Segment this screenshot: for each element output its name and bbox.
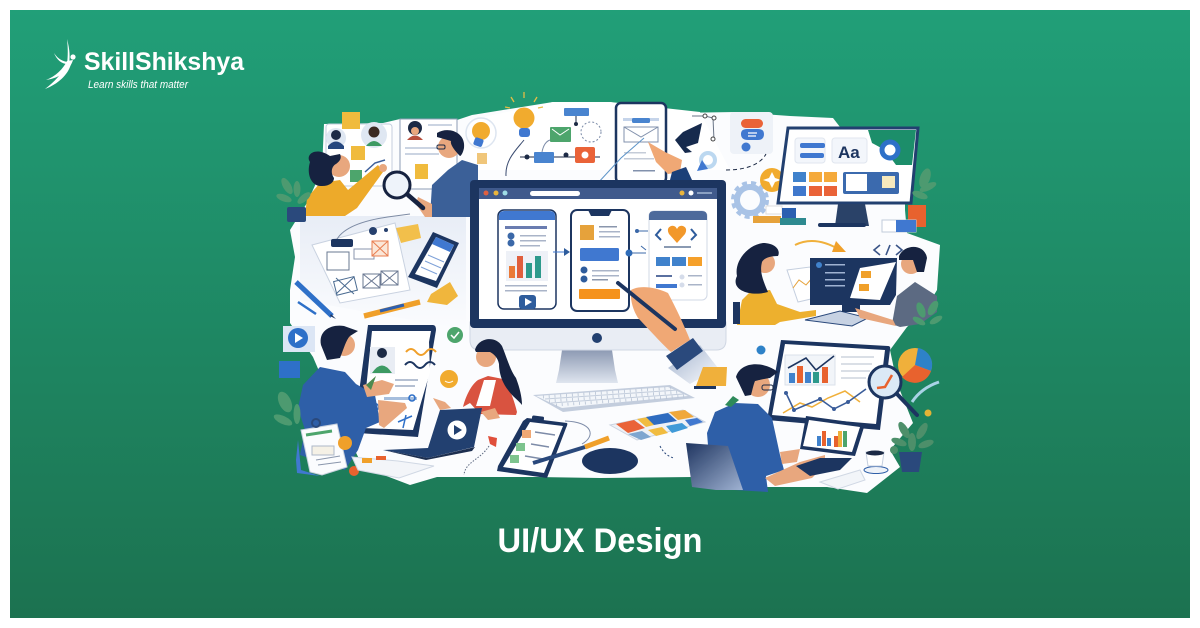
speech badges (440, 327, 463, 388)
magnifier (384, 172, 423, 208)
office chair (686, 443, 743, 490)
profile card: left (326, 112, 392, 186)
person: man with glasses (416, 130, 478, 217)
monitor stand (556, 350, 618, 383)
clip and wire (464, 436, 497, 475)
paper on desk (352, 456, 434, 478)
logo wordmark: SkillShikshya (84, 48, 245, 76)
plant at left (272, 389, 300, 428)
wireframe desk scene (296, 214, 459, 319)
laptop with charts (796, 416, 865, 489)
phone with hand pointing (597, 103, 692, 184)
main monitor (470, 180, 726, 384)
stylus pen (533, 438, 609, 463)
design system monitor (778, 128, 918, 227)
wireframe notebook (312, 214, 410, 303)
gears and star badge (726, 154, 806, 225)
logo icon: leaping figure (45, 39, 76, 89)
potted plant (890, 420, 935, 472)
logo tagline: Learn skills that matter (88, 79, 189, 91)
phone screen: analytics (498, 210, 556, 309)
central illustration (272, 92, 944, 493)
analytics monitor (767, 340, 890, 430)
monitor chin (470, 322, 726, 350)
window controls (484, 190, 712, 196)
person: woman with tablet (733, 243, 824, 325)
arrow and code symbols (795, 241, 902, 255)
magnifier with trend (869, 366, 917, 415)
large light bulb (505, 92, 543, 176)
coffee cup (864, 450, 888, 474)
top-left scene: people reviewing profile cards (275, 112, 496, 222)
card screen: favourite (649, 211, 707, 300)
pencils (296, 282, 420, 319)
phone screen: list (571, 210, 629, 311)
design tool tile (730, 112, 773, 154)
person: man at laptop (707, 364, 825, 492)
keyboard (533, 385, 695, 412)
connector arrow (553, 248, 570, 256)
person: woman in red jacket (433, 339, 522, 420)
small note and droplet (660, 346, 766, 458)
monitor frame (470, 180, 726, 328)
hand with stylus (618, 283, 718, 384)
clipboard note (296, 419, 359, 476)
type specimen: Aa (838, 143, 860, 162)
white torn-paper backdrop (290, 102, 940, 493)
pen tool icon (675, 114, 717, 171)
laptop with play button (383, 408, 482, 460)
computer mouse (582, 448, 638, 474)
connector node (626, 229, 648, 256)
trend swoosh (912, 382, 939, 416)
profile card: right (400, 119, 457, 189)
person: man in blue shirt (298, 326, 407, 470)
plant sprig (911, 299, 944, 327)
logo: SkillShikshya (45, 39, 245, 91)
dark monitor (805, 258, 897, 326)
pie chart (898, 348, 932, 383)
flow diagram nodes (520, 108, 601, 163)
clipboard checklist (497, 415, 590, 478)
sticky note and symbols (369, 224, 421, 243)
bottom-left scene: reviewing a tablet (272, 325, 522, 478)
handheld phone (408, 232, 459, 288)
bottom-right scene: analytics (660, 340, 939, 492)
top-middle flow diagram (505, 92, 938, 232)
person: man with glasses at monitor (855, 247, 937, 327)
tablet prototype (354, 325, 436, 437)
person: woman in yellow (275, 152, 387, 222)
video tile (279, 326, 315, 378)
colour palette tile (610, 410, 705, 440)
folder note (427, 282, 458, 305)
small bulb with orbit (466, 118, 496, 164)
right-middle scene: designers collaborating (733, 241, 944, 327)
plant and boxes at right (882, 167, 938, 232)
title: UI/UX Design (498, 522, 702, 560)
